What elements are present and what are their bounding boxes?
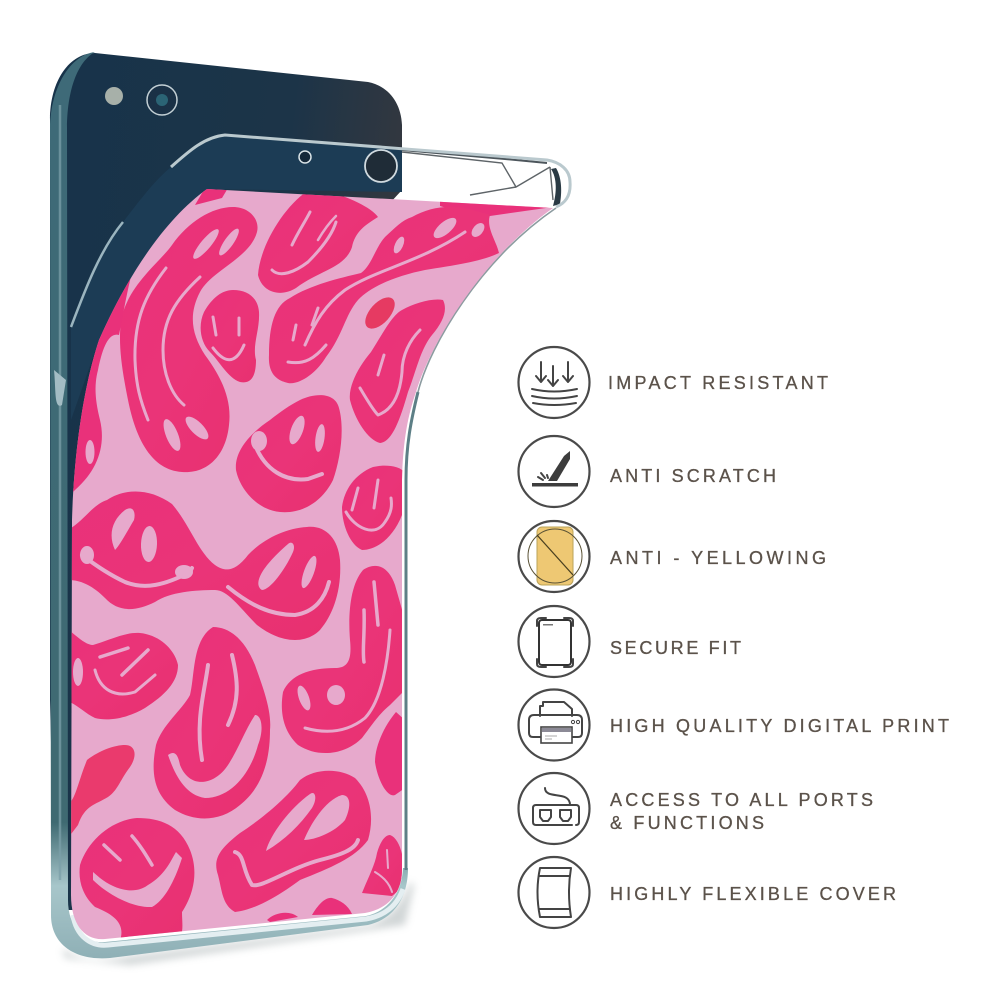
blob centre face (236, 395, 342, 512)
feature: ports (518, 773, 873, 844)
icon: yellow phone struck through (518, 521, 590, 592)
phone flash (105, 87, 123, 105)
label: ANTI - YELLOWING (610, 548, 826, 568)
eye in edge blob (86, 440, 94, 464)
blob right drip face (350, 300, 445, 443)
left edge blob (73, 278, 130, 492)
bottom bezel highlight (73, 889, 403, 945)
right edge of case (406, 392, 418, 870)
feature: anti yellowing (518, 521, 826, 592)
bottom small blobs (267, 898, 352, 922)
phone back (50, 53, 402, 910)
blob face top middle (258, 190, 378, 293)
top pink strip right (440, 202, 549, 216)
icon: phone with corner bumpers (518, 606, 590, 677)
case corner dark inset (551, 168, 561, 206)
feature: anti scratch (518, 436, 776, 507)
phone and clear case illustration (50, 52, 570, 965)
feature list (518, 347, 949, 928)
label: ACCESS TO ALL PORTS (610, 790, 873, 810)
left side bezel of case (50, 52, 408, 958)
feature: digital print (518, 690, 949, 760)
blob double face bow (68, 491, 340, 640)
red blob left (68, 745, 135, 838)
blob small right face (342, 466, 404, 550)
label: IMPACT RESISTANT (608, 373, 828, 393)
case camera hole (365, 150, 397, 182)
side button (54, 370, 66, 406)
blob centre lower long face (154, 627, 270, 818)
printed sheet with pattern (60, 180, 560, 950)
blob lower middle face (216, 771, 371, 912)
blob right lower face (282, 566, 405, 753)
blob lower left smile face (80, 818, 194, 945)
case top edge line (402, 150, 547, 163)
feature: flexible cover (518, 857, 896, 928)
icon: impact arrows (518, 347, 590, 418)
feature: secure fit (518, 606, 741, 677)
label: HIGH QUALITY DIGITAL PRINT (610, 716, 949, 736)
bottom right small blob (362, 835, 405, 896)
case lip right arm (402, 149, 557, 207)
icon: blade scratching surface (518, 436, 590, 507)
red oval drop (365, 297, 395, 329)
feature: impact resistant (518, 347, 828, 418)
blob large flowing top right (269, 207, 499, 383)
case drop shadow (62, 882, 414, 965)
case left curve highlight (71, 222, 123, 327)
left bezel highlight (59, 105, 61, 880)
right edge blob (375, 712, 405, 795)
icon: port connector (518, 773, 590, 844)
phone camera (147, 85, 177, 115)
blob face top left (120, 207, 258, 472)
icon: printer (518, 690, 590, 760)
label: HIGHLY FLEXIBLE COVER (610, 884, 896, 904)
sheet curved outline (418, 208, 556, 392)
label: ANTI SCRATCH (610, 466, 776, 486)
clear case interior (71, 135, 402, 420)
case top edge highlight (171, 135, 570, 207)
blob lower left face (72, 632, 178, 720)
sheet background (60, 180, 560, 950)
top pink strip left (195, 188, 228, 205)
label: second line: & FUNCTIONS (610, 813, 764, 833)
icon: flexible case (518, 857, 590, 928)
blob small face (201, 290, 259, 382)
window inner fold (402, 152, 553, 200)
case small hole (299, 151, 311, 163)
label: SECURE FIT (610, 638, 741, 658)
